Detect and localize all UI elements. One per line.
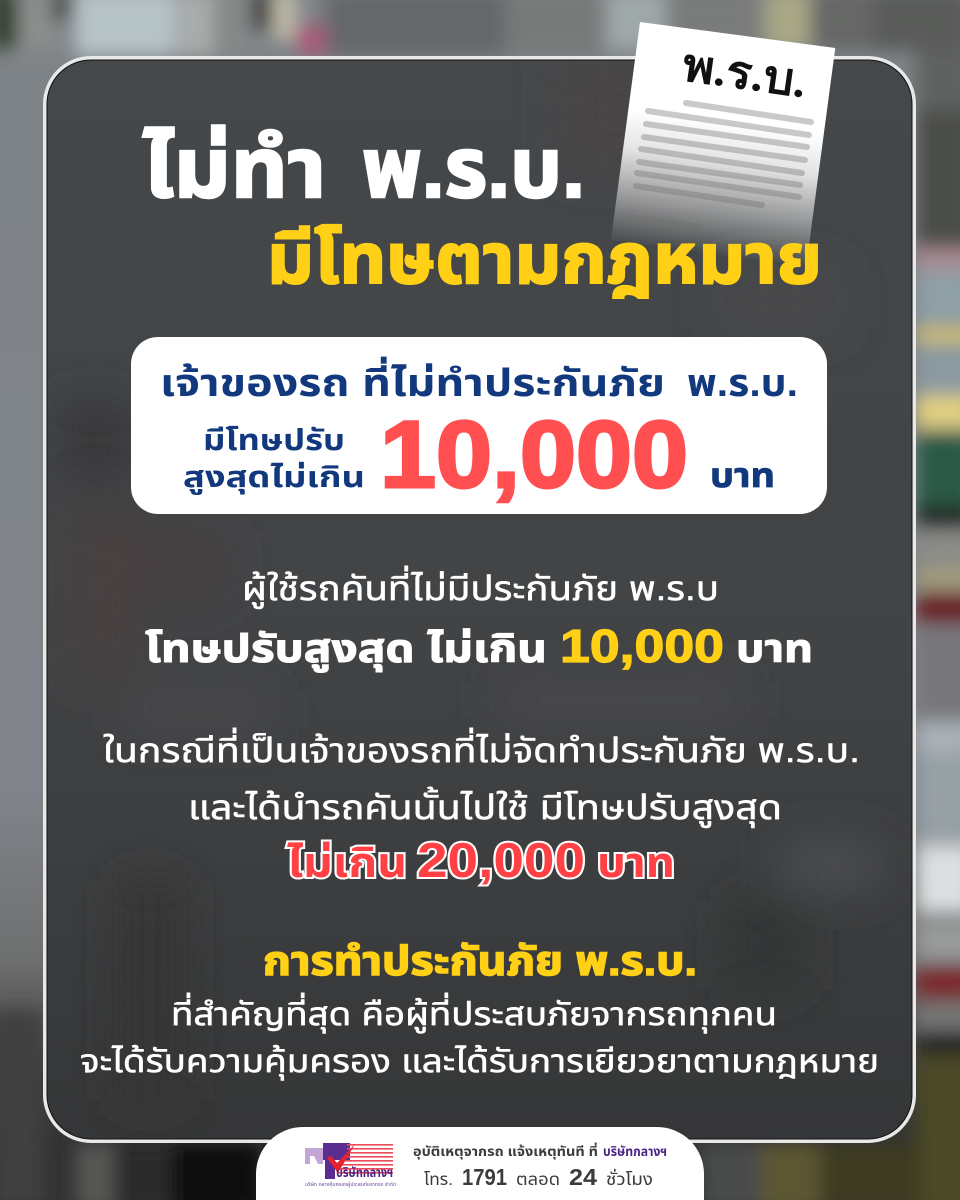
user fine text: ผู้ใช้รถคันที่ไม่มีประกันภัย พ.ร.บ xyxy=(242,565,719,609)
document heading: พ.ร.บ. xyxy=(680,39,809,107)
highlighted amount xyxy=(287,834,675,888)
footer line 2: 1791 xyxy=(462,1164,507,1190)
benefit text: ที่สำคัญที่สุด คือผู้ที่ประสบภัยจากรถทุกคน xyxy=(171,992,777,1034)
user fine text: 10,000 xyxy=(560,620,724,672)
footer line 2: ชั่วโมง xyxy=(606,1168,653,1189)
footer line 2: 24 xyxy=(569,1164,597,1190)
owner heading: พ.ร.บ. xyxy=(687,363,798,405)
footer line 1 xyxy=(413,1142,667,1159)
owner using car text: ในกรณีที่เป็นเจ้าของรถที่ไม่จัดทำประกันภัย พ.ร.บ. xyxy=(103,727,860,770)
benefit text: จะได้รับความคุ้มครอง และได้รับการเยียวยาตามกฎหมาย xyxy=(80,1043,879,1080)
owner using car text: และได้นำรถคันนั้นไปใช้ มีโทษปรับสูงสุด xyxy=(188,786,782,828)
footer tab xyxy=(256,1127,704,1200)
title line 1: ไม่ทำ xyxy=(143,121,326,215)
user fine text xyxy=(145,565,813,672)
user fine text: โทษปรับสูงสุด ไม่เกิน xyxy=(145,628,547,672)
icon: company logo xyxy=(305,1143,396,1188)
highlighted amount: บาท xyxy=(597,839,675,886)
footer line 2: ตลอด xyxy=(516,1170,560,1189)
owner heading: เจ้าของรถ ที่ไม่ทำประกันภัย xyxy=(160,356,665,405)
highlighted amount: 20,000 xyxy=(417,834,585,888)
owner using car text xyxy=(103,727,860,888)
benefit text xyxy=(80,938,879,1080)
footer line 2: โทร. xyxy=(424,1170,453,1189)
highlighted amount: ไม่เกิน xyxy=(287,839,407,886)
document text lines xyxy=(630,103,811,227)
title line 1 xyxy=(143,121,585,215)
fine amount: 10,000 xyxy=(380,402,688,508)
user fine text: บาท xyxy=(736,628,813,671)
icon: พ.ร.บ. document xyxy=(611,22,835,266)
icon: company logo: บริษัทกลางฯ xyxy=(336,1165,393,1180)
footer line 2 xyxy=(424,1164,653,1190)
baht: บาท xyxy=(710,457,775,495)
title xyxy=(143,121,822,298)
benefit text: การทำประกันภัย พ.ร.บ. xyxy=(263,938,697,984)
title line 2: มีโทษตามกฎหมาย xyxy=(267,220,822,298)
title line 1: พ.ร.บ. xyxy=(362,121,585,215)
fine label: สูงสุดไม่เกิน xyxy=(183,462,365,495)
owner heading xyxy=(160,356,798,405)
icon: company logo: บริษัท กลางคุ้มครองผู้ประสบภัยจากรถ จำกัด xyxy=(305,1181,396,1188)
panel: owner fine xyxy=(131,337,827,514)
fine label xyxy=(183,425,365,495)
footer line 1: อุบัติเหตุจากรถ แจ้งเหตุทันที ที่ xyxy=(413,1142,598,1159)
footer line 1: บริษัทกลางฯ xyxy=(603,1144,667,1159)
fine label: มีโทษปรับ xyxy=(203,425,345,457)
